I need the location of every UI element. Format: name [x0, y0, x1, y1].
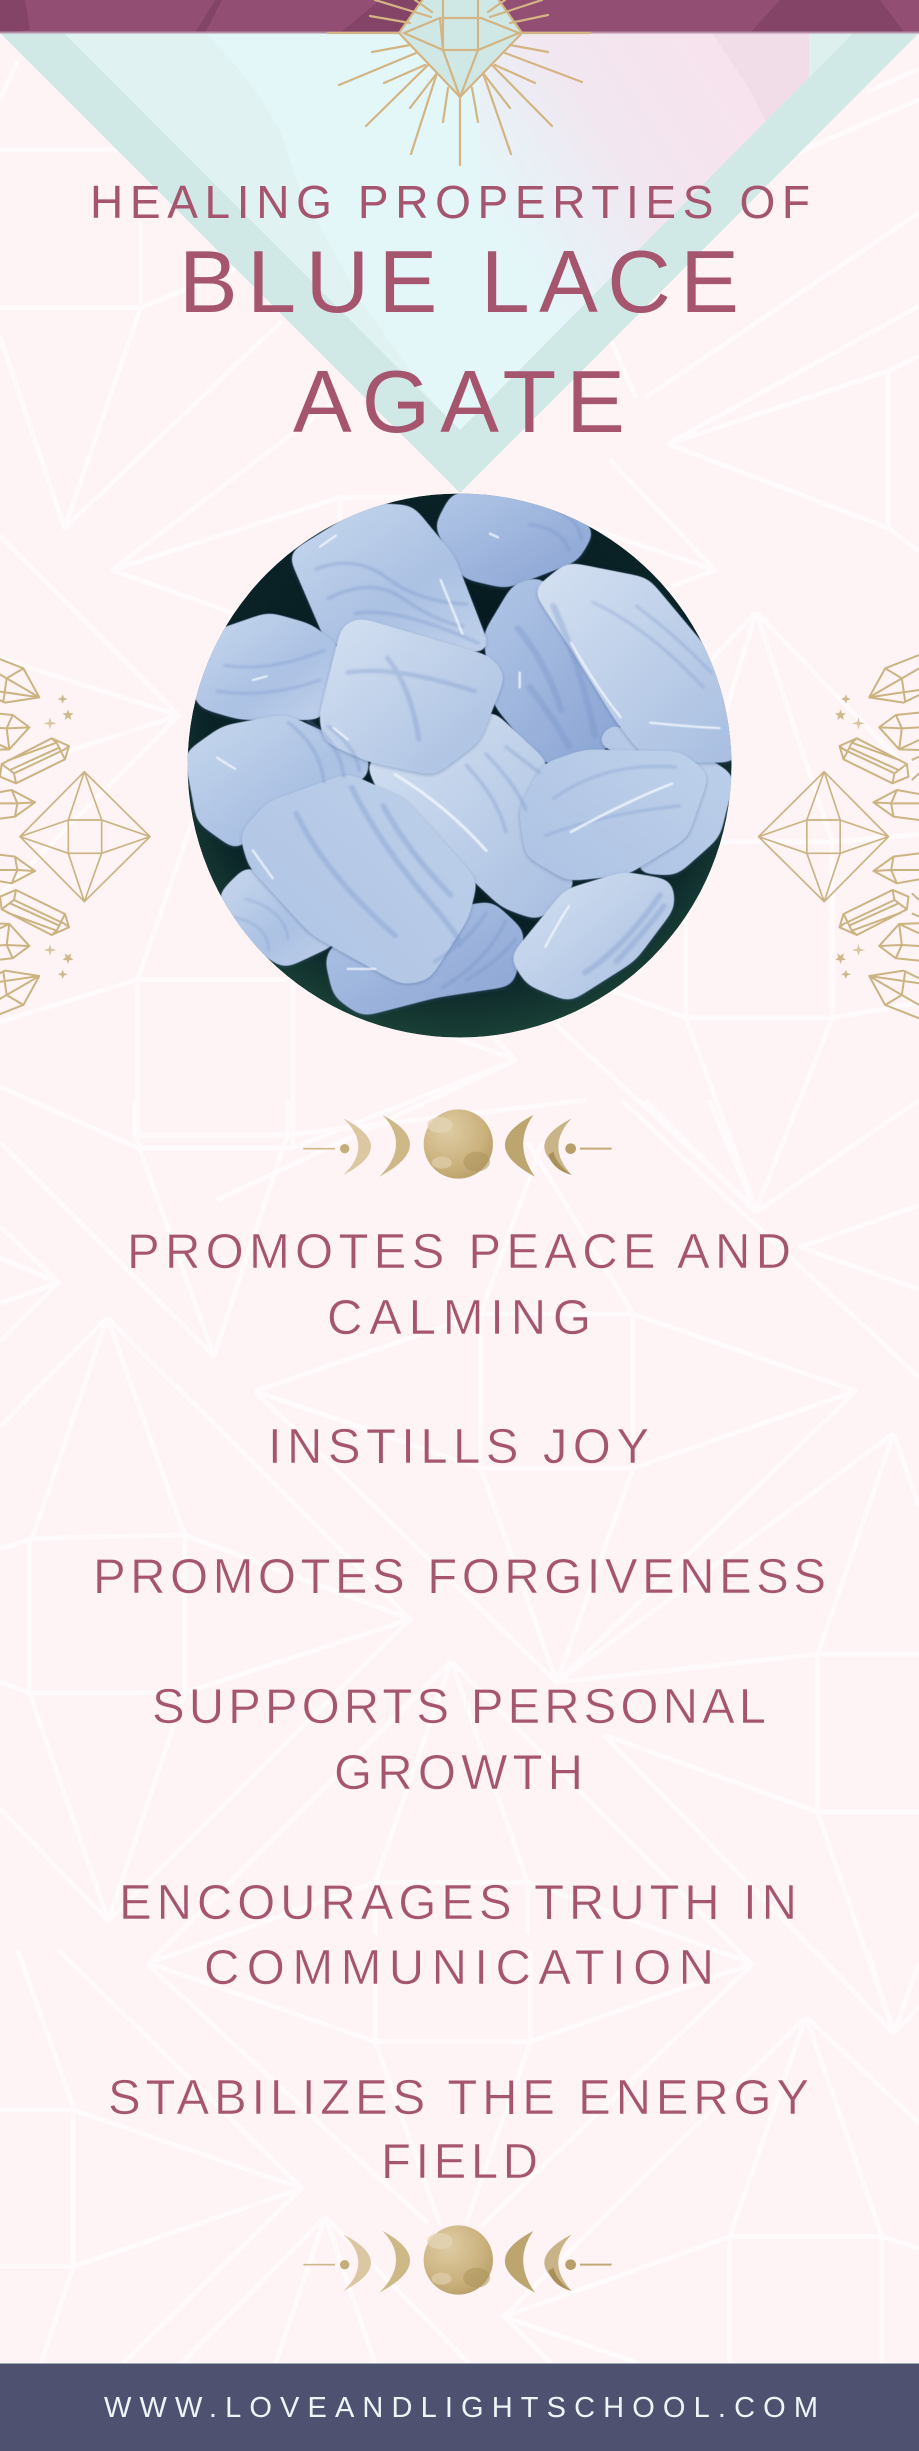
- property 6 line 1: STABILIZES THE ENERGY: [108, 2071, 809, 2125]
- title line: blue lace: BLUE LACE: [179, 232, 739, 331]
- property 2: INSTILLS JOY: [268, 1420, 649, 1474]
- property 5 line 2: COMMUNICATION: [204, 1941, 714, 1995]
- side crystals right: [759, 655, 919, 1018]
- property 5 line 1: ENCOURAGES TRUTH IN: [119, 1876, 797, 1930]
- property 4 line 1: SUPPORTS PERSONAL: [152, 1680, 766, 1734]
- icon: moon phases bottom: [303, 2225, 612, 2295]
- footer url: WWW.LOVEANDLIGHTSCHOOL.COM: [104, 2392, 818, 2424]
- footer band: [0, 2363, 919, 2451]
- top band: [0, 0, 919, 34]
- property 6 line 2: FIELD: [381, 2135, 538, 2189]
- property 4 line 2: GROWTH: [334, 1746, 583, 1800]
- title line: agate: AGATE: [293, 352, 625, 451]
- icon: diamond left: [20, 772, 150, 902]
- title line: healing properties of: HEALING PROPERTIES OF: [90, 176, 810, 228]
- circular photo: blue lace agate stones: [188, 494, 732, 1038]
- property 1 line 2: CALMING: [327, 1291, 591, 1345]
- icon: sunburst crystal: [328, 0, 590, 165]
- icon: moon phases top: [303, 1109, 612, 1179]
- icon: diamond right: [759, 772, 889, 902]
- teal triangle with watercolor: [0, 33, 919, 493]
- title: [90, 176, 810, 451]
- side crystals left: [0, 655, 150, 1018]
- property 3: PROMOTES FORGIVENESS: [93, 1550, 826, 1604]
- list of properties: [93, 1225, 826, 2189]
- property 1 line 1: PROMOTES PEACE AND: [127, 1225, 791, 1279]
